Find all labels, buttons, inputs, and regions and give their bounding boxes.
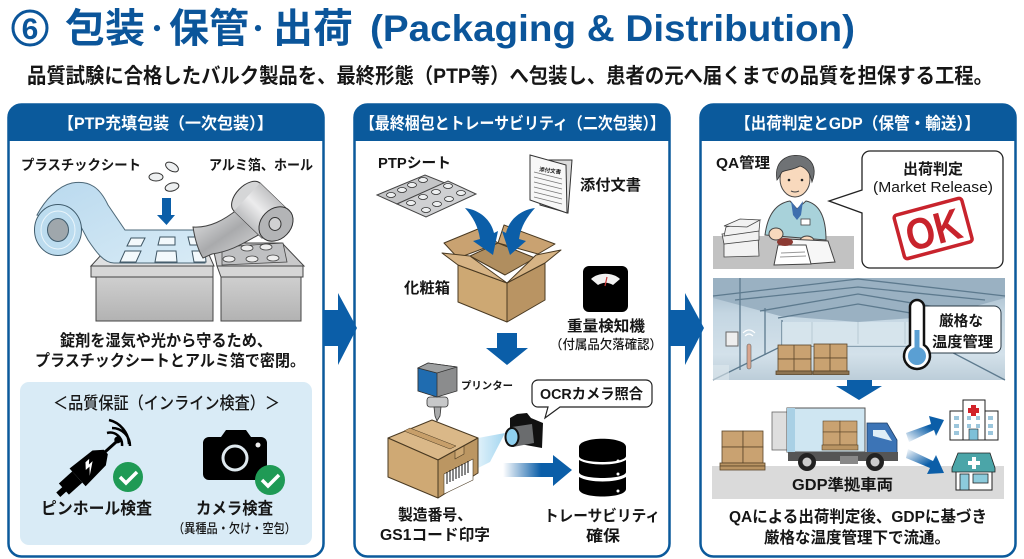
icon: pinhole probe <box>50 420 130 504</box>
arrow: insert into carton <box>502 208 535 255</box>
tablets <box>149 160 180 193</box>
arrow: to database <box>503 455 572 486</box>
label: lot number: 製造番号、 <box>398 506 472 524</box>
label: lot number: GS1コード印字 <box>380 526 490 544</box>
title japanese: 出荷 <box>273 7 353 51</box>
label: camera inspection: （異種品・欠け・空包） <box>173 521 296 536</box>
label: traceability <box>544 506 660 545</box>
caption: プラスチックシートとアルミ箔で密閉。 <box>35 351 305 370</box>
illustration: stamp and documents <box>774 238 835 265</box>
illustration: printer <box>418 363 457 421</box>
panel: PTP packaging <box>8 104 324 556</box>
desk <box>713 236 854 269</box>
label: camera inspection: カメラ検査 <box>196 499 273 518</box>
title <box>13 7 855 51</box>
icon: database <box>579 439 626 496</box>
title japanese: ・ <box>145 16 169 43</box>
icon: check <box>113 462 143 492</box>
title japanese: 保管 <box>169 7 249 51</box>
title number badge: 6 <box>22 13 38 46</box>
icon: camera <box>203 430 267 480</box>
panel: release and GDP <box>700 104 1016 556</box>
label: weight checker <box>550 317 662 352</box>
arrow: sheets into carton <box>465 208 498 255</box>
label: insert: 添付文書 <box>580 176 641 194</box>
label: pinhole inspection: ピンホール検査 <box>41 499 152 518</box>
label: camera inspection <box>173 499 296 536</box>
callout: market release <box>829 151 1003 268</box>
caption <box>35 331 305 370</box>
down arrow <box>157 198 175 225</box>
icon: OCR camera <box>506 413 543 448</box>
illustration: shipping carton <box>388 420 478 498</box>
temperature label: 厳格な <box>939 312 983 330</box>
stamp: OK: OK <box>900 199 967 261</box>
panel header: 【PTP充填包装（一次包装）】 <box>58 113 273 133</box>
blister cavities <box>120 237 206 262</box>
panel: traceability <box>354 104 670 556</box>
label: carton: 化粧箱 <box>404 279 450 297</box>
arrow: to hospital <box>906 416 944 442</box>
icon: check <box>255 465 285 495</box>
panel: inline inspection <box>20 382 312 545</box>
illustration: blister machine <box>34 160 304 321</box>
illustration: PTP sheets <box>377 175 476 217</box>
sensor <box>726 330 755 369</box>
illustration: warehouse <box>713 278 1005 380</box>
label: plastic sheet: プラスチックシート <box>21 157 141 173</box>
caption: QAによる出荷判定後、GDPに基づき <box>729 507 987 526</box>
ground band <box>712 466 1004 499</box>
illustration: document stack <box>722 219 760 257</box>
plastic film <box>37 182 208 263</box>
label: GDP vehicle: GDP準拠車両 <box>792 475 893 494</box>
label: QA management: QA管理 <box>716 154 771 172</box>
icon: weight scale <box>583 266 628 312</box>
arrow: step 2 to 3 <box>670 293 704 365</box>
title english: (Packaging & Distribution) <box>370 8 855 49</box>
foil blisters <box>222 243 287 265</box>
panel header: 【最終梱包とトレーサビリティ（二次包装）】 <box>360 113 665 133</box>
panel header <box>700 104 1016 141</box>
title japanese: ・ <box>246 16 270 43</box>
temperature label <box>916 306 1001 353</box>
title japanese: 包装 <box>65 7 145 51</box>
temperature label: 温度管理 <box>932 333 994 351</box>
label: lot number <box>380 506 490 544</box>
film roll <box>34 204 82 256</box>
panel header <box>8 104 324 141</box>
panel header <box>354 104 670 141</box>
label: aluminium foil: アルミ箔、ホール <box>209 157 313 173</box>
illustration: package insert <box>530 155 572 213</box>
caption: 錠剤を湿気や光から守るため、 <box>60 331 272 350</box>
pallets <box>776 344 849 374</box>
callout: OCR camera check <box>532 380 652 418</box>
callout: OCR camera check: OCRカメラ照合 <box>540 386 643 403</box>
machine body <box>91 230 304 321</box>
callout: market release: (Market Release) <box>873 179 993 196</box>
label: traceability: トレーサビリティ <box>544 506 660 525</box>
arrow: to pharmacy <box>906 449 944 474</box>
label: weight checker: 重量検知機 <box>567 317 645 335</box>
arrow: step 1 to 2 <box>323 293 357 365</box>
foil roll <box>226 176 300 248</box>
illustration: carton <box>442 225 561 322</box>
illustration: QA person <box>765 155 826 246</box>
label: traceability: 確保 <box>586 526 621 545</box>
illustration: package insert: 添付文書 <box>539 165 562 176</box>
illustration: camera light cone <box>478 433 505 468</box>
illustration: pallet boxes <box>720 431 765 470</box>
caption: 厳格な温度管理下で流通。 <box>764 528 950 547</box>
caption <box>729 507 987 547</box>
callout: market release: 出荷判定 <box>903 160 963 178</box>
arrow: down <box>836 380 882 400</box>
label: weight checker: （付属品欠落確認） <box>550 337 662 352</box>
icon: hospital <box>950 400 998 440</box>
label: printer: プリンター <box>461 380 513 392</box>
arrow: down <box>486 333 528 365</box>
icon: pharmacy <box>952 453 995 490</box>
panel header: 【出荷判定とGDP（保管・輸送）】 <box>735 113 980 133</box>
label: PTP sheet: PTPシート <box>378 156 451 172</box>
inspection heading: ＜品質保証（インライン検査）＞ <box>53 394 280 413</box>
title number badge <box>13 11 47 46</box>
illustration: truck <box>772 408 898 471</box>
icon: thermometer <box>904 300 930 369</box>
foil sheet <box>193 209 264 258</box>
